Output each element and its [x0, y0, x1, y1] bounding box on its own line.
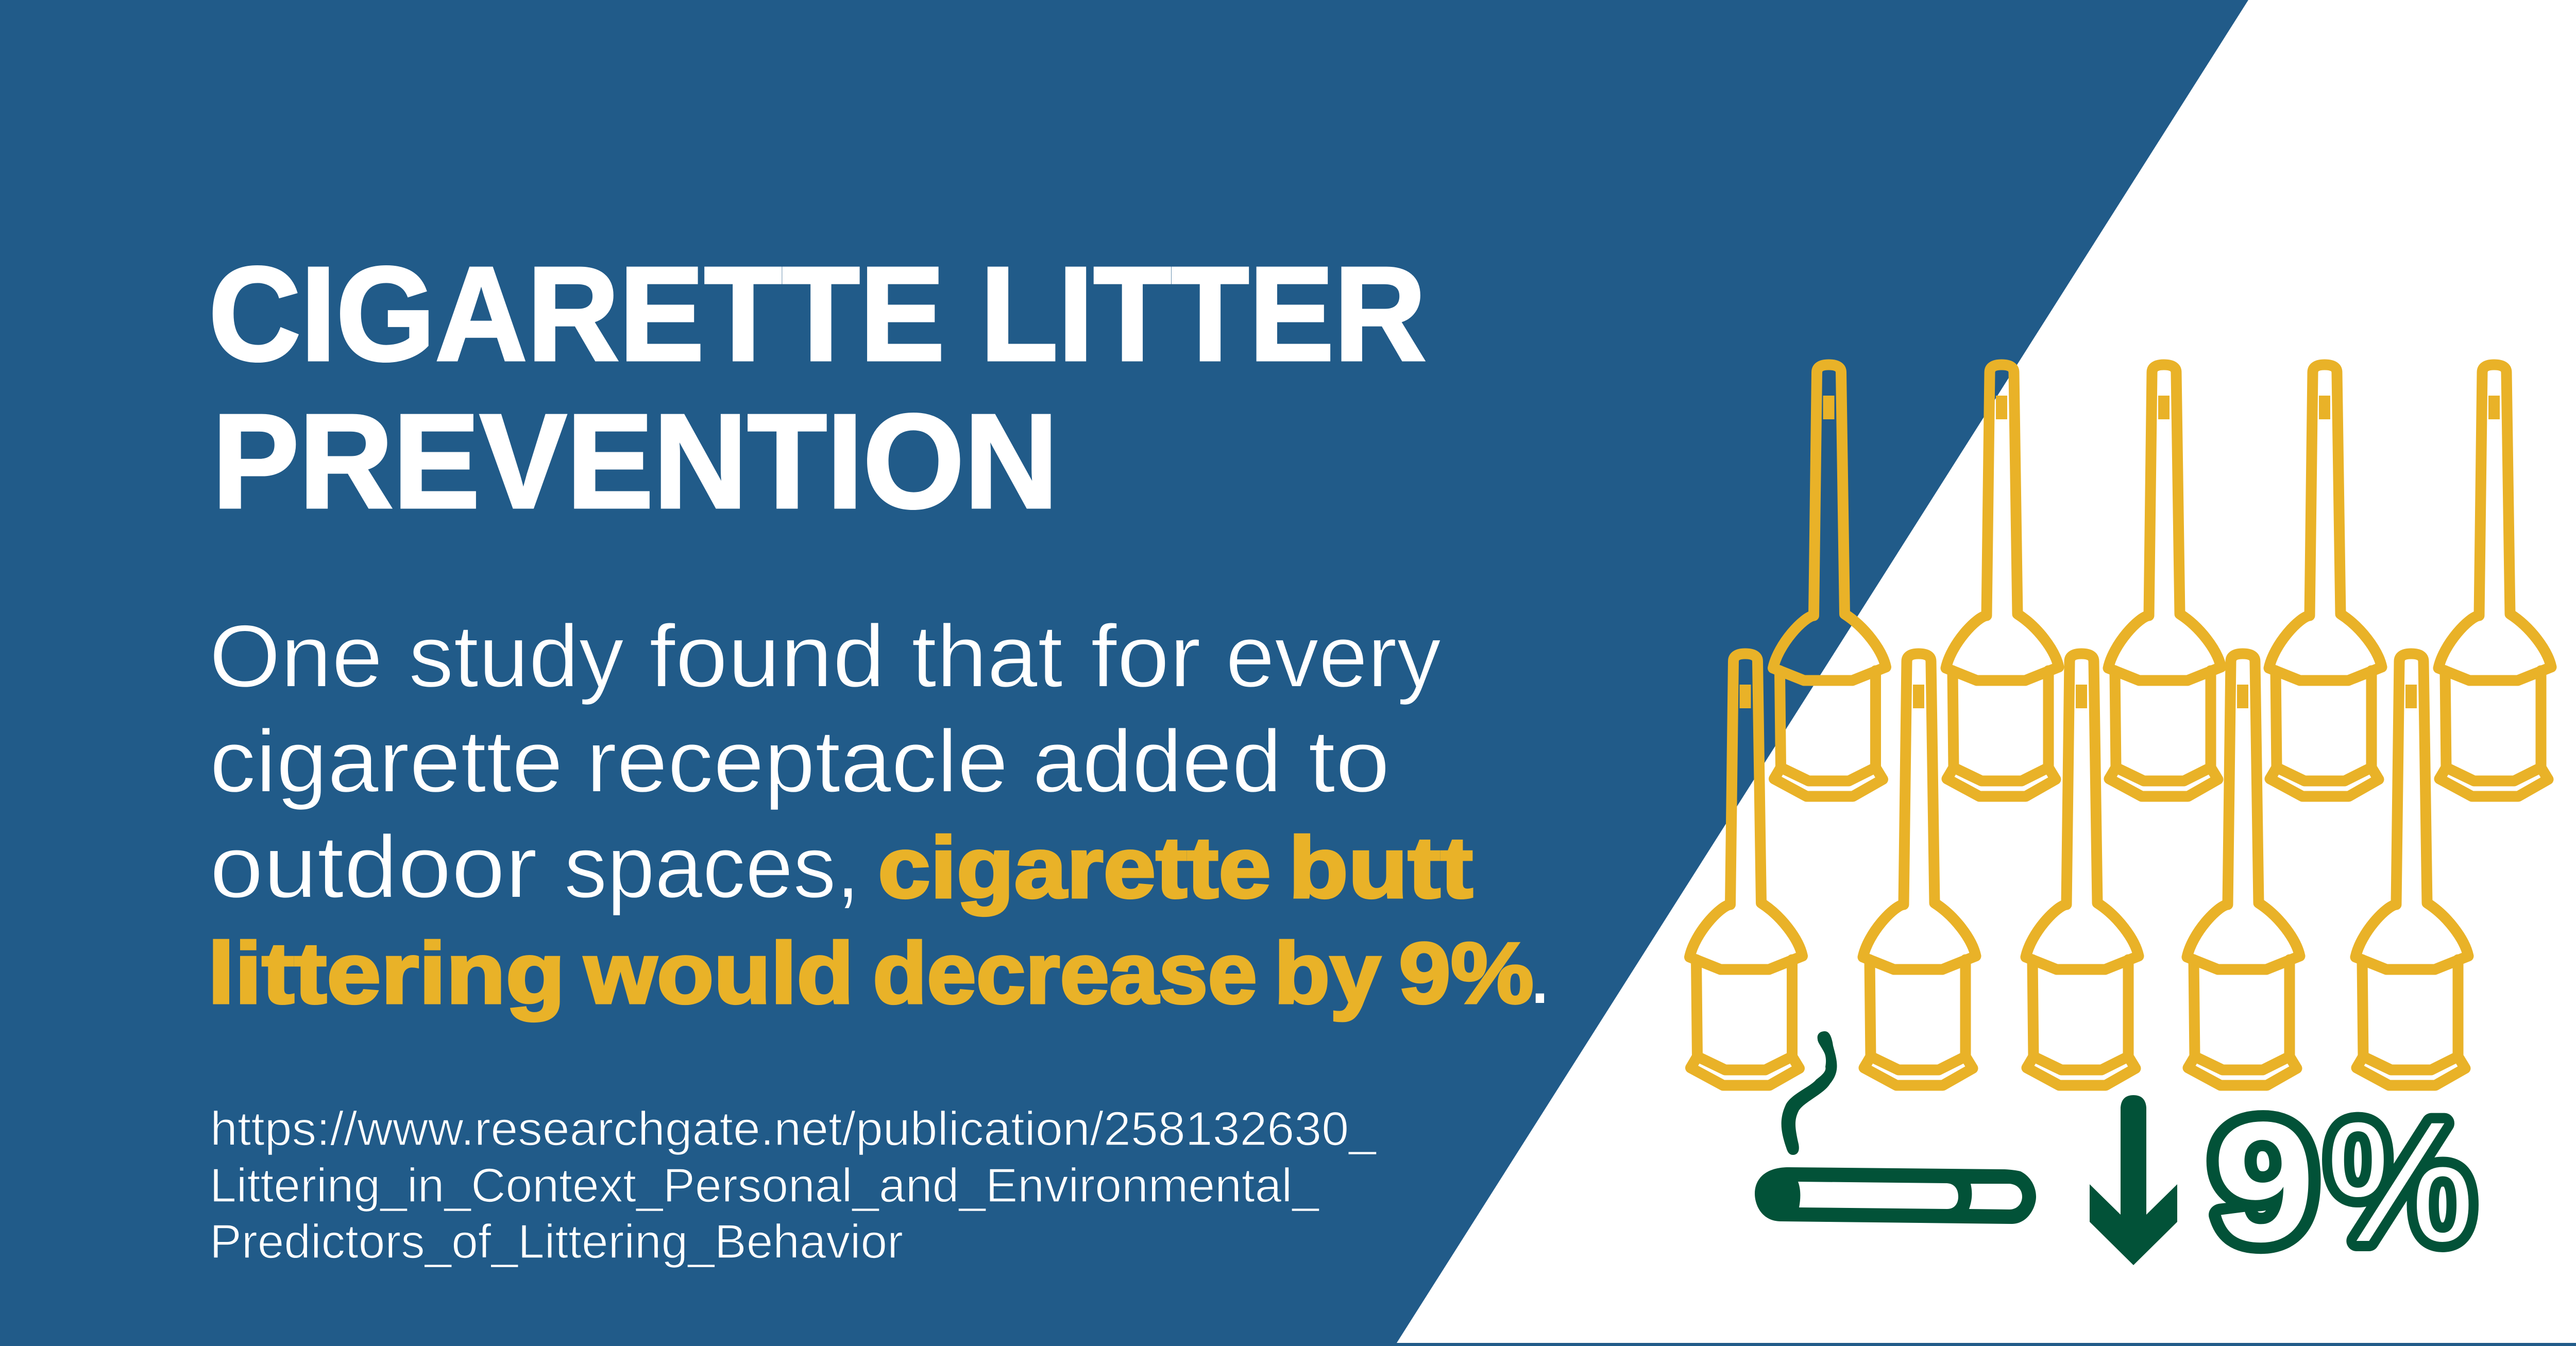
body line 1: that: [911, 607, 1063, 706]
body line 3 highlight: [878, 819, 1473, 916]
source line 3: Predictors_of_Littering_Behavior: [210, 1215, 903, 1268]
title: [209, 240, 1426, 536]
white diagonal panel: [1397, 0, 2576, 1343]
body line 4 highlight: littering: [208, 925, 565, 1021]
body line 4 highlight: 9%: [1399, 925, 1534, 1021]
body line 3 highlight: butt: [1289, 819, 1473, 916]
icon: receptacle row 2 no 2: [1863, 654, 1976, 1085]
body line 2: [210, 712, 1390, 811]
icon: receptacle row 1 no 1: [1773, 365, 1886, 796]
stat: 9 percent outlined: [2212, 1086, 2475, 1277]
body line 1: study: [409, 607, 624, 706]
body line 3 white: spaces,: [564, 817, 860, 916]
icon: receptacle row 1 no 2: [1946, 365, 2059, 796]
icon: receptacle row 2 no 1: [1690, 654, 1802, 1085]
body line 1: One: [209, 607, 383, 706]
icon: receptacle row 1 no 3: [2108, 365, 2221, 796]
icon group: cigarette receptacles: [1690, 365, 2551, 1085]
body line 1: [209, 607, 1441, 706]
source link text: [210, 1102, 1377, 1268]
smoke wisp: [1782, 1031, 1837, 1155]
body line 1: every: [1226, 607, 1441, 706]
icon: receptacle row 1 no 4: [2269, 365, 2382, 796]
icon: receptacle row 2 no 4: [2187, 654, 2300, 1085]
icon: cigarette with smoke: [1755, 1031, 2036, 1224]
body line 4 highlight: by: [1274, 925, 1381, 1021]
body line 2: receptacle: [586, 712, 1008, 811]
icon: receptacle row 2 no 5: [2355, 654, 2468, 1085]
body text block: [208, 607, 1552, 1022]
body line 3 white: [210, 817, 860, 916]
digit 9: 9: [2212, 1086, 2315, 1277]
body line 4 period: .: [1528, 923, 1552, 1022]
body line 2: to: [1308, 712, 1390, 811]
body line 3 white: outdoor: [210, 817, 537, 916]
icon: receptacle row 1 no 5: [2438, 365, 2551, 796]
source line 2: Littering_in_Context_Personal_and_Environmental_: [210, 1158, 1319, 1212]
icon: down arrow: [2090, 1095, 2177, 1265]
title line 2: PREVENTION: [212, 387, 1058, 536]
body line 4 highlight: [208, 925, 1534, 1021]
body line 2: cigarette: [210, 712, 563, 811]
body line 2: added: [1032, 712, 1282, 811]
body line 3 highlight: cigarette: [878, 819, 1271, 916]
cigarette body: [1755, 1167, 2036, 1224]
percent sign: %: [2326, 1086, 2475, 1277]
body line 1: found: [649, 607, 885, 706]
title line 1: CIGARETTE LITTER: [209, 240, 1426, 389]
source line 1: https://www.researchgate.net/publication/258132630_: [210, 1102, 1377, 1155]
body line 1: for: [1091, 607, 1201, 706]
body line 4 highlight: would: [584, 925, 854, 1021]
icon: receptacle row 2 no 3: [2026, 654, 2139, 1085]
body line 4 highlight: decrease: [873, 925, 1257, 1021]
